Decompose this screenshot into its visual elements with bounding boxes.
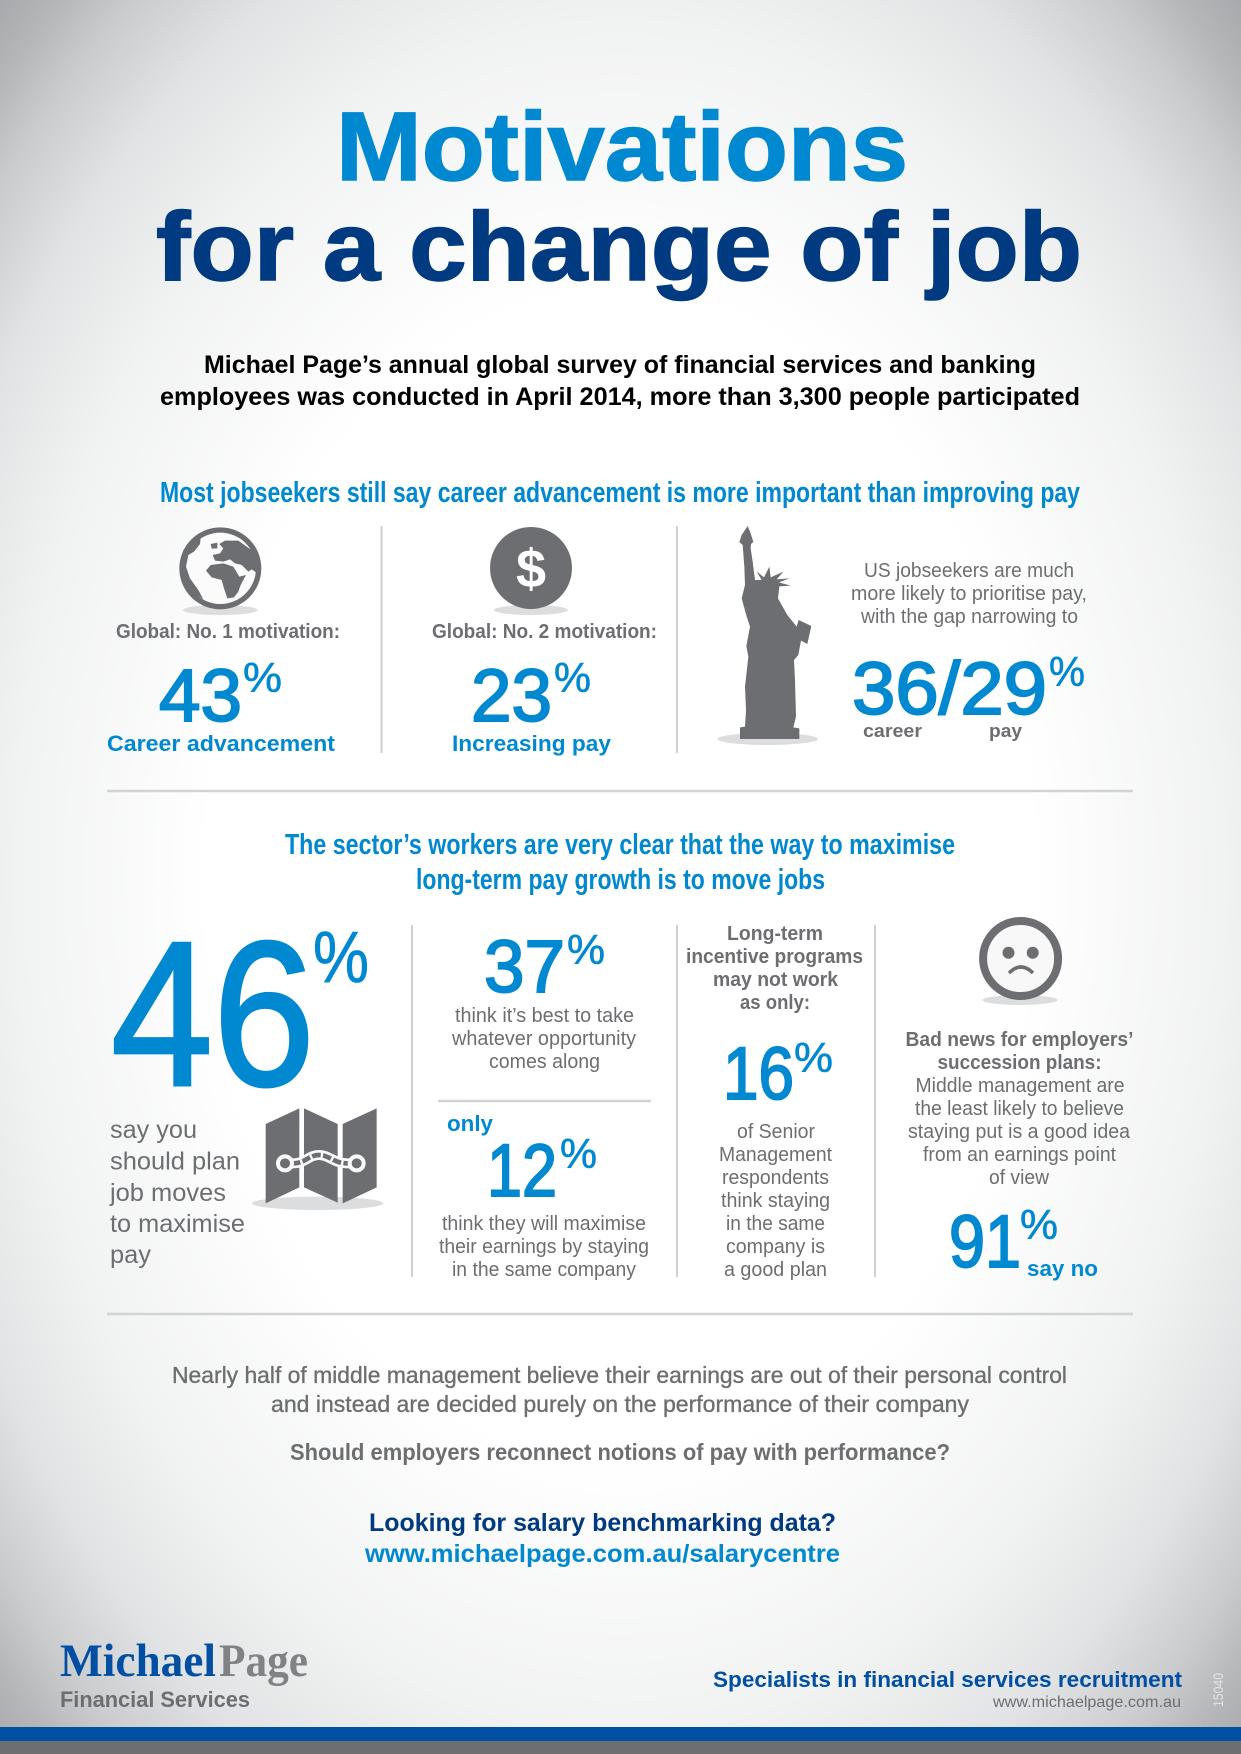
stat: 46%: % [313, 918, 369, 998]
intro text [160, 351, 1080, 411]
logo: Michael Page: Michael [60, 1635, 216, 1687]
panel: bad news for employers [906, 921, 1134, 1283]
heading: move jobs: long-term pay growth is to move jobs [416, 864, 825, 896]
text: long-term incentive: as only: [740, 992, 810, 1014]
panel: 46% plan job moves [109, 899, 383, 1269]
logo: Michael Page [60, 1635, 308, 1712]
stat: 43%: % [243, 654, 282, 701]
stat: 43%: 43 [159, 654, 242, 737]
text: succession plans: Middle management are [916, 1075, 1124, 1097]
stat: 37%: % [567, 926, 605, 973]
panel: global no. 2 motivation [432, 527, 657, 756]
icon: dollar coin: $ [516, 539, 546, 599]
stat: 91%: % [1020, 1201, 1058, 1248]
text: take whatever opportunity: comes along [489, 1051, 600, 1073]
stat: 12%: % [560, 1130, 597, 1177]
panel: global no. 1 motivation [107, 527, 340, 756]
stat: 43% [159, 654, 282, 737]
stat: 37% [484, 925, 605, 1008]
icon: dollar coin [490, 527, 572, 615]
stat: 16%: % [794, 1034, 833, 1081]
text: middle management earnings [172, 1362, 1067, 1417]
text: senior management: Management [719, 1144, 832, 1166]
stat: 12%: 12 [487, 1129, 557, 1212]
text: say you should plan: pay [110, 1241, 152, 1269]
text: US jobseekers: with the gap narrowing to [860, 606, 1078, 628]
text: say you should plan: job moves [109, 1179, 226, 1207]
panel: US jobseekers [717, 526, 1087, 745]
text: take whatever opportunity: think it’s best to take [455, 1005, 634, 1027]
label: global no. 1: Global: No. 1 motivation: [116, 621, 340, 643]
text: say you should plan: to maximise [110, 1210, 245, 1238]
stat: 23% [471, 654, 591, 737]
panel: 37% and 12% [438, 925, 651, 1281]
text: maximise by staying: in the same company [452, 1259, 636, 1281]
logo: Michael Page: Financial Services [60, 1687, 250, 1712]
stat: 46%: 46 [111, 899, 315, 1129]
text: US jobseekers: more likely to prioritise pay, [851, 583, 1087, 605]
text: US jobseekers: US jobseekers are much [864, 560, 1074, 582]
label: say no: say no [1027, 1256, 1098, 1281]
text: US jobseekers [851, 560, 1087, 628]
text: succession plans: from an earnings point [923, 1144, 1116, 1166]
text: succession plans: the least likely to believe [915, 1098, 1124, 1120]
text: maximise by staying: think they will maximise [442, 1213, 646, 1235]
intro text: Michael Page’s annual global survey of financial services and banking [204, 351, 1036, 379]
logo: Michael Page: Page [219, 1635, 308, 1687]
label: global no. 2: Global: No. 2 motivation: [432, 621, 657, 643]
callout: salary benchmarking: Looking for salary benchmarking data? [369, 1509, 836, 1537]
intro text: employees was conducted in April 2014, more than 3,300 people participated [160, 383, 1080, 411]
labels: career and pay: pay [989, 721, 1022, 741]
text: long-term incentive [686, 923, 863, 1014]
labels: career and pay [863, 721, 1022, 741]
stat: 37%: 37 [484, 925, 565, 1008]
callout: salary benchmarking [364, 1509, 840, 1568]
footer bars [0, 1727, 1241, 1754]
text: maximise by staying: their earnings by staying [439, 1236, 649, 1258]
tagline and website: Specialists in financial services recruitment [713, 1667, 1183, 1692]
text: senior management: in the same [726, 1213, 825, 1235]
icon: sad face [982, 921, 1058, 1005]
title: for a change of job [156, 192, 1082, 301]
text: take whatever opportunity [451, 1005, 636, 1073]
text: senior management: company is [726, 1236, 825, 1258]
text: long-term incentive: incentive programs [686, 946, 863, 968]
text: succession plans: staying put is a good idea [908, 1121, 1131, 1143]
text: senior management: a good plan [724, 1259, 827, 1281]
text: take whatever opportunity: whatever opportunity [451, 1028, 636, 1050]
icon: folded map [252, 1108, 383, 1210]
tagline and website: www.michaelpage.com.au [992, 1694, 1181, 1711]
stat: 91%: 91 [949, 1200, 1021, 1283]
stat: 23%: % [554, 654, 591, 701]
stat: 36/29%: 36/29 [852, 647, 1047, 730]
text: succession plans: of view [989, 1167, 1050, 1189]
stat: 36/29%: % [1049, 648, 1085, 695]
icon: statue of liberty [717, 526, 818, 745]
label: only: only [447, 1111, 494, 1136]
icon: globe [179, 527, 261, 615]
heading: move jobs: The sector’s workers are very clear that the way to maximise [285, 829, 955, 861]
text: succession plans [906, 1029, 1134, 1189]
text: middle management earnings: Nearly half of middle management believe their earnings are out of their personal control [172, 1362, 1067, 1388]
text: senior management: of Senior [737, 1121, 815, 1143]
text: succession plans: succession plans: [938, 1052, 1102, 1074]
job reference number: 15040 [1210, 1673, 1226, 1707]
tagline and website [713, 1667, 1183, 1711]
text: senior management: respondents [722, 1167, 829, 1189]
text: reconnect pay question: Should employers reconnect notions of pay with performance? [290, 1439, 950, 1465]
labels: career and pay: career [863, 721, 922, 741]
text: long-term incentive: may not work [713, 969, 839, 991]
label: increasing pay: Increasing pay [452, 731, 612, 756]
label: career advancement: Career advancement [107, 731, 336, 756]
text: senior management [719, 1121, 832, 1281]
callout: salary benchmarking: www.michaelpage.com.au/salarycentre [364, 1540, 840, 1568]
text: say you should plan [109, 1116, 245, 1269]
text: say you should plan: say you [110, 1116, 197, 1144]
text: middle management earnings: and instead are decided purely on the performance of their company [271, 1391, 969, 1417]
text: say you should plan: should plan [110, 1148, 240, 1176]
text: succession plans: Bad news for employers’ [906, 1029, 1134, 1051]
text: long-term incentive: Long-term [727, 923, 823, 945]
text: maximise by staying [439, 1213, 649, 1281]
title: Motivations [336, 92, 908, 201]
panel: long-term incentive programs [686, 923, 863, 1281]
title [156, 92, 1082, 301]
text: senior management: think staying [721, 1190, 830, 1212]
stat: 23%: 23 [471, 654, 552, 737]
heading: move jobs [285, 829, 955, 896]
stat: 16%: 16 [723, 1032, 794, 1115]
